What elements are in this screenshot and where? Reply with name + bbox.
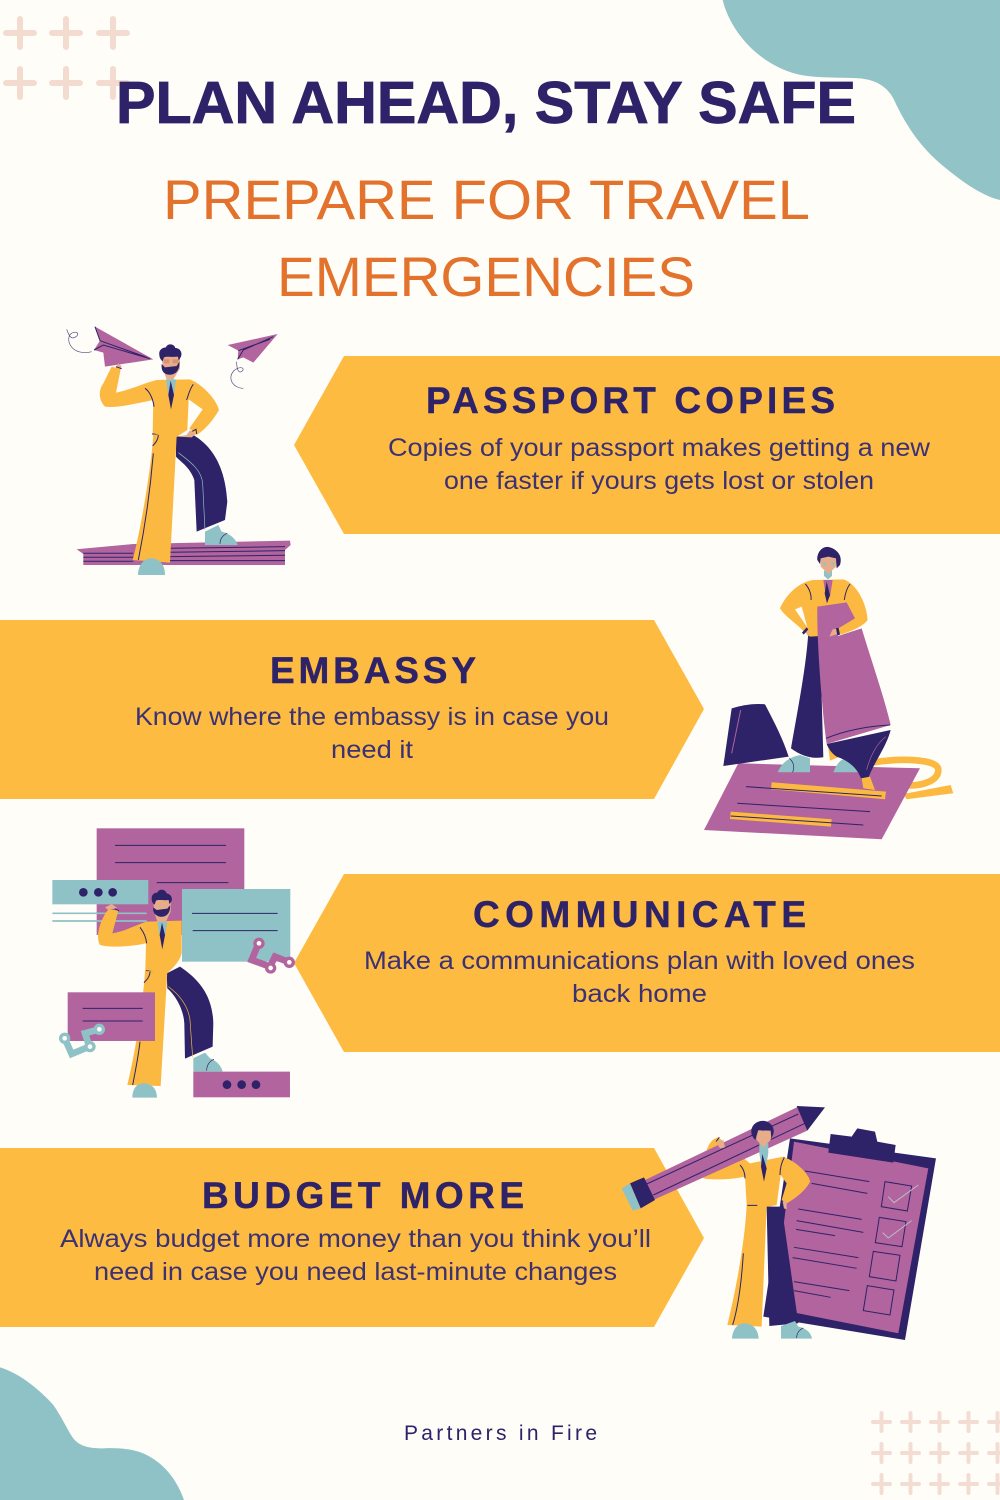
body text: one faster if yours gets lost or stolen <box>444 467 874 495</box>
icon: large paper plane <box>67 327 153 367</box>
footer credit: Partners in Fire <box>404 1422 597 1445</box>
icon: teal link nodes <box>61 1025 103 1054</box>
body text: need it <box>331 736 413 764</box>
title: PLAN AHEAD, STAY SAFE <box>116 70 856 136</box>
ribbon background <box>0 1148 704 1327</box>
illustration: man with paper planes on a book <box>67 327 291 575</box>
icon: purple typing bubble <box>193 1072 290 1097</box>
illustration: man with chat boxes <box>52 828 293 1098</box>
icon: book <box>77 541 291 565</box>
figure: man <box>100 344 238 575</box>
icon: purple link nodes <box>252 939 293 972</box>
figure: man holding marker <box>778 547 891 790</box>
body text: Make a communications plan with loved ones <box>364 947 915 975</box>
body text <box>135 703 609 764</box>
illustration: man with marker on paper <box>704 547 953 839</box>
ribbon background <box>294 874 1000 1052</box>
body text <box>60 1225 651 1286</box>
panel: embassy <box>0 620 704 799</box>
subtitle: EMERGENCIES <box>277 245 695 308</box>
icon: clipboard <box>763 1128 936 1340</box>
body text <box>388 434 931 495</box>
panel: budget more <box>0 1148 704 1327</box>
icon: large purple message box <box>97 828 244 935</box>
icon: marker cap <box>723 704 789 766</box>
heading: COMMUNICATE <box>473 894 806 935</box>
icon: teal typing bubble <box>52 880 148 921</box>
icon: teal message box <box>182 889 290 962</box>
illustration: man with pencil and clipboard <box>622 1106 936 1340</box>
decoration: top-left plus pattern <box>6 19 127 97</box>
body text: Know where the embassy is in case you <box>135 703 609 731</box>
figure: man head <box>751 1121 774 1182</box>
body text: back home <box>572 980 707 1008</box>
panel: communicate <box>294 874 1000 1052</box>
icon: purple message box <box>68 992 155 1041</box>
decoration: top-right teal blob <box>723 0 1000 200</box>
body text: Copies of your passport makes getting a new <box>388 434 931 462</box>
figure: man behind pencil <box>703 1137 812 1339</box>
panel: passport copies <box>294 356 1000 534</box>
icon: small paper plane <box>228 334 278 388</box>
ribbon background <box>0 620 704 799</box>
icon: yellow ink squiggle <box>873 760 953 799</box>
figure: man <box>98 890 223 1098</box>
heading: EMBASSY <box>270 650 476 691</box>
ribbon background <box>294 356 1000 534</box>
decoration: bottom-left teal blob <box>0 1367 184 1500</box>
icon: document <box>704 763 920 839</box>
decoration: bottom-right plus pattern <box>873 1413 1000 1493</box>
body text <box>364 947 915 1008</box>
subtitle <box>163 168 810 308</box>
icon: giant pencil <box>622 1106 825 1211</box>
heading: PASSPORT COPIES <box>426 380 835 421</box>
body text: Always budget more money than you think you’ll <box>60 1225 651 1253</box>
body text: need in case you need last-minute changes <box>94 1258 617 1286</box>
subtitle: PREPARE FOR TRAVEL <box>163 168 810 231</box>
heading: BUDGET MORE <box>202 1175 524 1216</box>
